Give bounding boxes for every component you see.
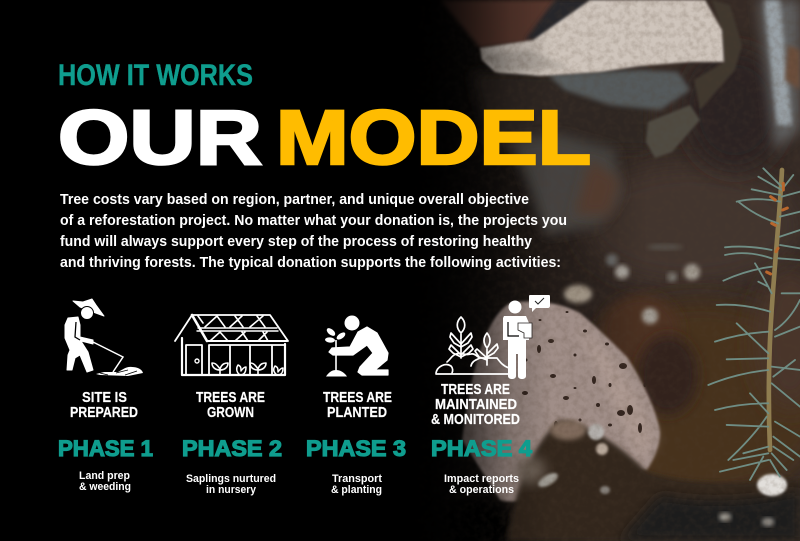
phase 3 description: & planting <box>331 484 382 496</box>
phase 1 description: & weeding <box>79 481 131 493</box>
icon: person planting a sapling <box>325 316 388 376</box>
label: trees are grown: TREES ARE <box>196 389 265 406</box>
intro paragraph <box>60 192 567 271</box>
label: trees are grown <box>196 389 265 421</box>
title: our model <box>58 95 591 181</box>
intro paragraph: of a reforestation project. No matter what your donation is, the projects you <box>60 213 567 229</box>
intro paragraph: fund will always support every step of the process of restoring healthy <box>60 234 533 250</box>
label: site is prepared: PREPARED <box>70 404 138 421</box>
label: site is prepared <box>70 389 138 421</box>
phase 2 heading: PHASE 2 <box>182 436 282 461</box>
icon: farmer preparing the soil <box>65 299 143 376</box>
phase 1 column <box>58 299 153 493</box>
phase 4 description <box>444 473 519 496</box>
phase 2 column <box>175 315 288 496</box>
phase 3 column <box>306 316 406 496</box>
label: trees are maintained and monitored: & MONITORED <box>431 411 520 428</box>
phase 4 heading: PHASE 4 <box>431 436 533 461</box>
label: trees are maintained and monitored <box>431 381 520 428</box>
phase 3 heading: PHASE 3 <box>306 436 406 461</box>
label: trees are planted: TREES ARE <box>323 389 392 406</box>
label: trees are planted: PLANTED <box>327 404 387 421</box>
phase 1 heading: PHASE 1 <box>58 436 153 461</box>
icon: person monitoring plants with checklist <box>436 295 550 379</box>
phase 3 description <box>331 473 382 496</box>
intro paragraph: and thriving forests. The typical donation supports the following activities: <box>60 255 561 271</box>
seedling <box>708 168 800 480</box>
phase 1 description <box>79 470 131 493</box>
icon: greenhouse <box>175 315 288 375</box>
phase 4 column <box>431 295 550 496</box>
phase 3 description: Transport <box>332 473 382 485</box>
phase 1 description: Land prep <box>79 470 130 482</box>
phase 2 description <box>186 473 276 496</box>
phase 4 description: Impact reports <box>444 473 519 485</box>
phase 4 description: & operations <box>449 484 514 496</box>
intro paragraph: Tree costs vary based on region, partner, and unique overall objective <box>60 192 529 208</box>
phase 2 description: in nursery <box>206 484 257 496</box>
label: trees are grown: GROWN <box>207 404 254 421</box>
title: our model: MODEL <box>276 95 591 181</box>
heading: how it works: HOW IT WORKS <box>58 59 253 92</box>
label: trees are maintained and monitored: MAINTAINED <box>435 396 517 413</box>
label: trees are planted <box>323 389 392 421</box>
title: our model: OUR <box>58 95 262 181</box>
label: trees are maintained and monitored: TREES ARE <box>441 381 510 398</box>
label: site is prepared: SITE IS <box>82 389 127 406</box>
phase 2 description: Saplings nurtured <box>186 473 276 485</box>
